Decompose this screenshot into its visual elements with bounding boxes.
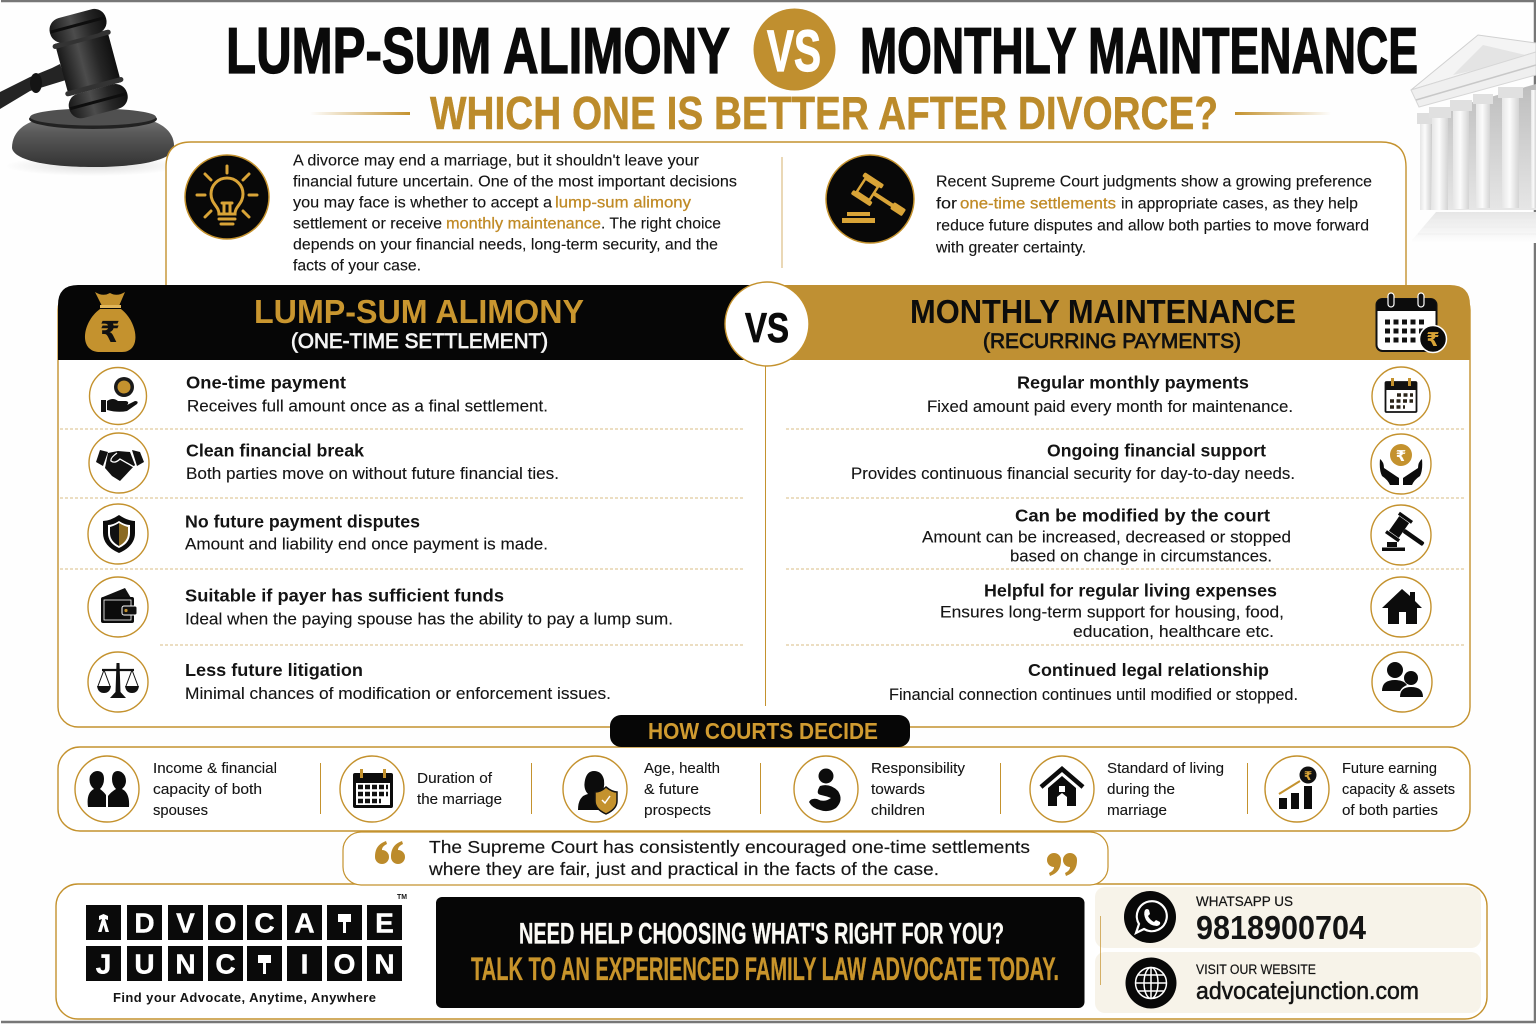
- header: monthly maintenance: [766, 285, 1470, 360]
- factor: duration of the marriage: the marriage: [417, 791, 502, 808]
- panel: introduction: [166, 142, 1406, 290]
- row: ongoing financial support: Ongoing financial support: [1047, 440, 1266, 460]
- row: helpful for regular living expenses: Ensures long-term support for housing, food,: [940, 604, 1284, 622]
- text: intro right: Recent Supreme Court judgments show a growing preference: [936, 174, 1372, 191]
- row: ongoing financial support: Provides continuous financial security for day-to-day needs.: [851, 465, 1295, 483]
- contact: website: advocatejunction.com: [1196, 978, 1419, 1005]
- row: can be modified by the court: Amount can be increased, decreased or stopped: [922, 528, 1291, 546]
- row: can be modified by the court: based on change in circumstances.: [1010, 548, 1272, 566]
- text: intro right: with greater certainty.: [935, 240, 1086, 257]
- icon: hands with rupee coin: ₹: [1396, 447, 1406, 465]
- factor: duration of the marriage: [340, 756, 502, 822]
- icon: calendar with rupee: [1376, 293, 1446, 352]
- icon: scales of justice: [88, 652, 148, 712]
- row: clean financial break: Both parties move on without future financial ties.: [186, 465, 559, 483]
- row: continued legal relationship: [889, 652, 1432, 712]
- logo: advocate junction: O: [215, 908, 236, 938]
- logo: advocate junction: C: [215, 948, 236, 980]
- logo: advocate junction: J: [96, 948, 111, 980]
- text: intro left: A divorce may end a marriage, but it shouldn't leave your: [293, 153, 699, 170]
- header: lump-sum alimony: (ONE-TIME SETTLEMENT): [291, 330, 548, 353]
- row: suitable if payer has sufficient funds: Suitable if payer has sufficient funds: [185, 586, 504, 606]
- logo: advocate junction: I: [301, 948, 308, 980]
- row: one-time payment: One-time payment: [186, 372, 346, 392]
- panel: comparison: [58, 282, 1470, 727]
- icon: closing quote: [1047, 853, 1077, 876]
- call to action: NEED HELP CHOOSING WHAT'S RIGHT FOR YOU?: [519, 918, 1004, 950]
- logo: advocate junction: V: [176, 908, 195, 938]
- contact: whatsapp: 9818900704: [1196, 909, 1367, 946]
- logo: advocate junction: N: [374, 948, 395, 980]
- row: suitable if payer has sufficient funds: [88, 577, 673, 637]
- icon: calendar: [1372, 367, 1430, 425]
- icon: gavel on black: [826, 155, 914, 243]
- factor: income and financial capacity: Income & financial: [153, 760, 277, 777]
- factor: income and financial capacity: [75, 756, 277, 822]
- panel: supreme court quote: [343, 832, 1108, 885]
- text: intro left: . The right choice: [601, 216, 721, 233]
- row: continued legal relationship: Financial connection continues until modified or stopped.: [889, 686, 1298, 704]
- text: intro left: monthly maintenance: [446, 216, 601, 233]
- icon: house: [1371, 577, 1431, 637]
- contact: whatsapp: [1095, 887, 1481, 948]
- icon: gavel: [1371, 505, 1431, 565]
- factor: standard of living: [1030, 756, 1224, 822]
- contact: website: VISIT OUR WEBSITE: [1196, 962, 1316, 977]
- logo: advocate junction: U: [134, 948, 155, 980]
- subtitle: WHICH ONE IS BETTER AFTER DIVORCE?: [430, 87, 1218, 139]
- factor: income and financial capacity: spouses: [153, 802, 208, 819]
- title: lump-sum alimony: LUMP-SUM ALIMONY: [226, 14, 730, 87]
- row: helpful for regular living expenses: Helpful for regular living expenses: [984, 580, 1277, 600]
- icon: growth chart with rupee: [1265, 756, 1329, 822]
- icon: hand with coin: [90, 368, 146, 424]
- heading: how courts decide: HOW COURTS DECIDE: [648, 718, 878, 744]
- row: less future litigation: Minimal chances of modification or enforcement issues.: [185, 685, 611, 703]
- row: no future payment disputes: Amount and liability end once payment is made.: [185, 536, 548, 554]
- contact: whatsapp: WHATSAPP US: [1196, 894, 1293, 909]
- factor: duration of the marriage: Duration of: [417, 770, 493, 787]
- header: lump-sum alimony: [58, 285, 766, 360]
- factor: future earning capacity: capacity & assets: [1342, 781, 1455, 798]
- factor: responsibility towards children: [794, 756, 966, 822]
- logo: advocate junction: A: [294, 908, 315, 938]
- header: monthly maintenance: (RECURRING PAYMENTS): [983, 330, 1241, 353]
- factor: future earning capacity: of both parties: [1342, 802, 1438, 819]
- illustration: judge's gavel: [0, 6, 181, 176]
- factor: age health and prospects: prospects: [644, 802, 711, 819]
- row: regular monthly payments: Fixed amount paid every month for maintenance.: [927, 398, 1293, 416]
- text: intro right: one-time settlements: [960, 196, 1116, 213]
- icon: globe: [1126, 958, 1176, 1008]
- icon: whatsapp: [1124, 891, 1176, 943]
- factor: responsibility towards children: Responsibility: [871, 760, 966, 777]
- icon: light bulb: [185, 155, 269, 239]
- row: helpful for regular living expenses: education, healthcare etc.: [1073, 623, 1274, 641]
- icon: two people: [1372, 652, 1432, 712]
- logo: advocate junction: Find your Advocate, Anytime, Anywhere: [113, 990, 376, 1005]
- icon: wallet: [88, 577, 148, 637]
- header: monthly maintenance: MONTHLY MAINTENANCE: [910, 293, 1296, 330]
- icon: growth chart with rupee: ₹: [1304, 769, 1312, 783]
- badge: VS: [754, 8, 836, 90]
- contact: website: [1095, 952, 1481, 1013]
- factor: future earning capacity: [1265, 756, 1455, 822]
- text: intro left: [293, 153, 737, 275]
- badge: VS: VS: [767, 19, 821, 84]
- row: no future payment disputes: No future payment disputes: [185, 512, 420, 532]
- factor: future earning capacity: Future earning: [1342, 760, 1437, 777]
- icon: handshake: [89, 433, 149, 493]
- row: regular monthly payments: Regular monthly payments: [1017, 372, 1249, 392]
- factor: standard of living: during the: [1107, 781, 1175, 798]
- row: less future litigation: [88, 652, 611, 712]
- logo: advocate junction: C: [254, 908, 275, 938]
- row: no future payment disputes: [88, 504, 548, 564]
- text: intro right: in appropriate cases, as they help: [1121, 196, 1358, 213]
- icon: hands with rupee coin: [1371, 434, 1431, 494]
- call to action: [436, 897, 1084, 1008]
- icon: home: [1030, 756, 1094, 822]
- factor: age health and prospects: Age, health: [644, 760, 720, 777]
- row: ongoing financial support: [851, 434, 1431, 494]
- row: clean financial break: Clean financial break: [186, 440, 364, 460]
- icon: opening quote: [375, 841, 405, 864]
- header: lump-sum alimony: LUMP-SUM ALIMONY: [254, 293, 584, 330]
- row: regular monthly payments: [927, 367, 1430, 425]
- row: can be modified by the court: [922, 505, 1431, 566]
- factor: standard of living: Standard of living: [1107, 760, 1224, 777]
- factor: age health and prospects: [563, 756, 720, 822]
- factor: responsibility towards children: children: [871, 802, 925, 819]
- row: one-time payment: [90, 368, 548, 424]
- row: helpful for regular living expenses: [940, 577, 1431, 641]
- icon: money bag: ₹: [100, 315, 120, 349]
- logo: advocate junction: O: [334, 948, 355, 980]
- row: can be modified by the court: Can be modified by the court: [1015, 506, 1270, 526]
- text: intro left: lump-sum alimony: [555, 195, 691, 212]
- text: intro left: you may face is whether to accept a: [293, 195, 552, 212]
- factor: income and financial capacity: capacity of both: [153, 781, 262, 798]
- logo: advocate junction: E: [375, 908, 394, 938]
- panel: how courts decide factors: [58, 747, 1470, 831]
- logo: advocate junction: [86, 894, 407, 1005]
- badge: center VS: VS: [745, 304, 789, 351]
- factor: standard of living: marriage: [1107, 802, 1167, 819]
- icon: calendar with rupee: ₹: [1426, 329, 1440, 351]
- text: intro left: facts of your case.: [293, 258, 421, 275]
- panel: supreme court quote: where they are fair, just and practical in the facts of the case.: [428, 859, 939, 879]
- text: intro left: depends on your financial needs, long-term security, and the: [293, 237, 718, 254]
- icon: shield: [88, 504, 148, 564]
- call to action: TALK TO AN EXPERIENCED FAMILY LAW ADVOCATE TODAY.: [471, 951, 1059, 987]
- text: intro left: settlement or receive: [293, 216, 442, 233]
- row: one-time payment: Receives full amount once as a final settlement.: [187, 398, 548, 416]
- icon: parent holding child: [794, 756, 858, 822]
- panel: supreme court quote: The Supreme Court has consistently encouraged one-time settlements: [429, 837, 1030, 857]
- illustration: court building: [1411, 35, 1536, 243]
- icon: money bag: [85, 292, 135, 352]
- heading: how courts decide: [610, 715, 910, 747]
- icon: person with shield: [563, 756, 627, 822]
- text: intro right: for: [936, 196, 957, 213]
- factor: age health and prospects: & future: [644, 781, 699, 798]
- text: intro left: financial future uncertain. One of the most important decisions: [293, 174, 737, 191]
- icon: calendar: [340, 756, 404, 822]
- row: suitable if payer has sufficient funds: Ideal when the paying spouse has the ability to pay a lump sum.: [185, 610, 673, 628]
- logo: advocate junction: TM: [397, 894, 407, 901]
- row: continued legal relationship: Continued legal relationship: [1028, 660, 1269, 680]
- row: clean financial break: [89, 433, 559, 493]
- icon: two spouses: [75, 756, 139, 822]
- text: intro right: [935, 174, 1372, 257]
- text: intro right: reduce future disputes and allow both parties to move forward: [936, 218, 1369, 235]
- row: less future litigation: Less future litigation: [185, 660, 363, 680]
- logo: advocate junction: D: [134, 908, 155, 938]
- factor: responsibility towards children: towards: [871, 781, 925, 798]
- panel: footer: [56, 884, 1487, 1019]
- logo: advocate junction: N: [175, 948, 196, 980]
- badge: center VS: [725, 282, 809, 366]
